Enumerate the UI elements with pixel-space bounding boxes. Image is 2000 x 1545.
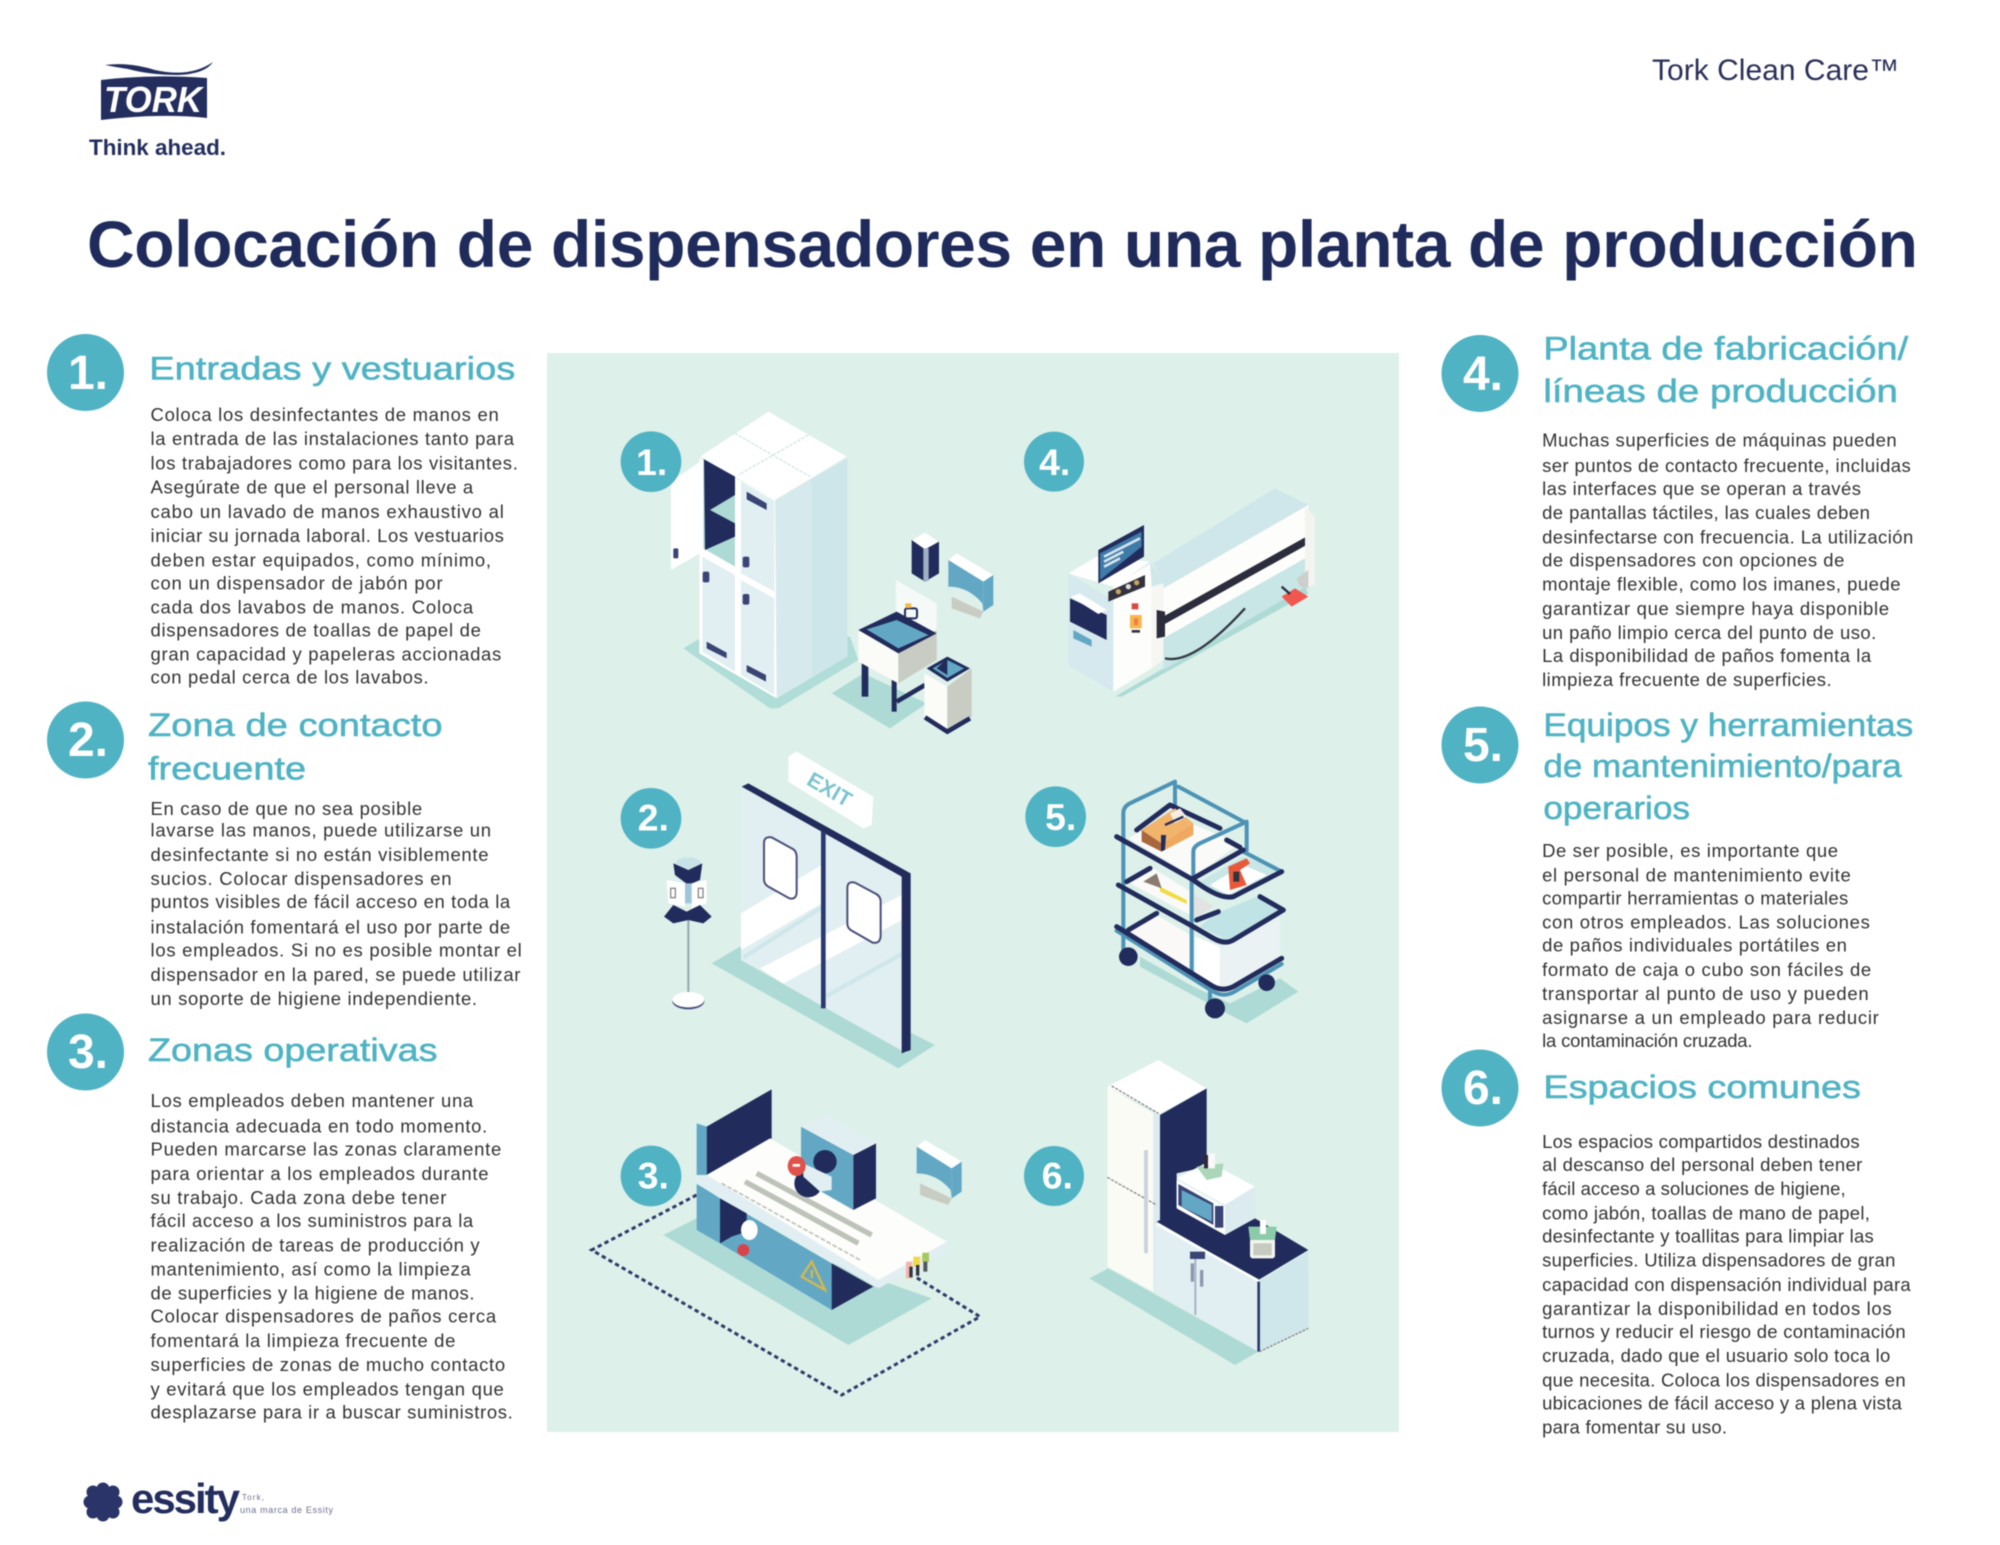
badge 3: 3. bbox=[68, 1026, 108, 1079]
heading 4: Planta de fabricación/ bbox=[1543, 331, 1909, 367]
body text 1: cabo un lavado de manos exhaustivo al bbox=[151, 501, 504, 522]
footer logo: Essity: Tork, bbox=[242, 1493, 264, 1502]
body text 6: al descanso del personal deben tener bbox=[1542, 1154, 1862, 1175]
body text 4: de dispensadores con opciones de bbox=[1542, 549, 1844, 570]
body text 3 bbox=[151, 1090, 513, 1422]
section 5: maintenance tools bbox=[1442, 706, 1913, 1051]
heading 2 bbox=[148, 707, 443, 786]
body text 4: ser puntos de contacto frecuente, incluidas bbox=[1542, 455, 1911, 476]
heading 5: operarios bbox=[1543, 790, 1690, 826]
heading 5: Equipos y herramientas bbox=[1543, 707, 1913, 743]
body text 3: Colocar dispensadores de paños cerca bbox=[151, 1306, 497, 1327]
body text 2: sucios. Colocar dispensadores en bbox=[151, 868, 452, 889]
badge 5 bbox=[1442, 706, 1518, 784]
body text 6: turnos y reducir el riesgo de contaminación bbox=[1542, 1321, 1906, 1342]
body text 4: desinfectarse con frecuencia. La utilización bbox=[1542, 526, 1913, 547]
footer logo: Essity bbox=[84, 1475, 334, 1522]
panel: illustrations background bbox=[547, 353, 1399, 1432]
body text 2: dispensador en la pared, se puede utilizar bbox=[151, 964, 520, 985]
body text 3: fácil acceso a los suministros para la bbox=[151, 1210, 474, 1231]
section 2: high-contact zone bbox=[47, 702, 522, 1009]
body text 4: Muchas superficies de máquinas pueden bbox=[1542, 429, 1897, 450]
logo: Tork: Think ahead. bbox=[89, 135, 226, 160]
body text 6: que necesita. Coloca los dispensadores en bbox=[1542, 1369, 1906, 1390]
body text 5: transportar al punto de uso y pueden bbox=[1542, 983, 1869, 1004]
logo: Tork: TORK bbox=[104, 79, 205, 120]
illustration 6: common area kitchen bbox=[1024, 1060, 1308, 1365]
body text 2 bbox=[151, 798, 522, 1009]
body text 6: para fomentar su uso. bbox=[1542, 1417, 1727, 1438]
illustration 6: common area kitchen: 6. bbox=[1042, 1154, 1073, 1196]
heading 2: frecuente bbox=[148, 750, 306, 786]
body text 1: con un dispensador de jabón por bbox=[151, 572, 443, 593]
body text 6: garantizar la disponibilidad en todos los bbox=[1542, 1298, 1892, 1319]
illustration 1: lockers and sink bbox=[621, 412, 993, 732]
body text 1: iniciar su jornada laboral. Los vestuarios bbox=[151, 525, 504, 546]
body text 4: de pantallas táctiles, las cuales deben bbox=[1542, 502, 1870, 523]
body text 1: la entrada de las instalaciones tanto para bbox=[151, 428, 515, 449]
badge 1: 1. bbox=[68, 347, 108, 400]
section 6: common areas bbox=[1442, 1050, 1911, 1438]
illustration 4: production line machine: 4. bbox=[1039, 441, 1070, 483]
illustration 5: tool trolley bbox=[1025, 782, 1298, 1023]
body text 1: Asegúrate de que el personal lleve a bbox=[151, 477, 474, 498]
section 4: manufacturing floor bbox=[1442, 331, 1913, 690]
body text 2: lavarse las manos, puede utilizarse un bbox=[151, 820, 491, 841]
body text 5: de paños individuales portátiles en bbox=[1542, 935, 1847, 956]
body text 6: Los espacios compartidos destinados bbox=[1542, 1131, 1860, 1152]
illustration 3: operating zone machine: 3. bbox=[638, 1154, 669, 1196]
body text 3: mantenimiento, así como la limpieza bbox=[151, 1259, 471, 1280]
body text 5: el personal de mantenimiento evite bbox=[1542, 864, 1851, 885]
heading 5: de mantenimiento/para bbox=[1543, 748, 1903, 784]
body text 4: montaje flexible, como los imanes, puede bbox=[1542, 574, 1900, 595]
body text 4: las interfaces que se operan a través bbox=[1542, 478, 1861, 499]
body text 2: desinfectante si no están visiblemente bbox=[151, 844, 489, 865]
illustration 2: exit doors and hygiene stand: EXIT bbox=[803, 767, 856, 812]
body text 5: asignarse a un empleado para reducir bbox=[1542, 1007, 1879, 1028]
footer logo: Essity: essity bbox=[131, 1475, 241, 1522]
heading 1: Entradas y vestuarios bbox=[149, 350, 515, 386]
badge 5: 5. bbox=[1463, 719, 1503, 772]
badge 1 bbox=[47, 334, 124, 411]
illustration 1: lockers and sink: 1. bbox=[636, 441, 667, 483]
heading 4: líneas de producción bbox=[1543, 373, 1898, 409]
illustration 3: operating zone machine bbox=[592, 1089, 980, 1395]
illustration 2: exit doors and hygiene stand: 2. bbox=[638, 797, 669, 839]
body text 3: superficies de zonas de mucho contacto bbox=[151, 1354, 505, 1375]
badge 2: 2. bbox=[68, 714, 108, 767]
body text 3: distancia adecuada en todo momento. bbox=[151, 1116, 487, 1137]
badge 2 bbox=[47, 702, 124, 778]
body text 4: garantizar que siempre haya disponible bbox=[1542, 598, 1889, 619]
body text 4 bbox=[1542, 429, 1913, 690]
body text 5: con otros empleados. Las soluciones bbox=[1542, 912, 1870, 933]
heading 6: Espacios comunes bbox=[1543, 1069, 1861, 1105]
body text 3: realización de tareas de producción y bbox=[151, 1234, 480, 1255]
section 1: entrances and changing rooms bbox=[47, 334, 518, 688]
body text 3: desplazarse para ir a buscar suministros. bbox=[151, 1401, 513, 1422]
body text 1: Coloca los desinfectantes de manos en bbox=[151, 404, 499, 425]
illustration 2: exit doors and hygiene stand bbox=[621, 752, 935, 1068]
badge 6: 6. bbox=[1463, 1062, 1503, 1115]
body text 5: De ser posible, es importante que bbox=[1542, 840, 1838, 861]
logo: Tork bbox=[89, 62, 226, 160]
heading 3: Zonas operativas bbox=[148, 1032, 437, 1068]
body text 6: fácil acceso a soluciones de higiene, bbox=[1542, 1178, 1846, 1199]
body text 6: superficies. Utiliza dispensadores de gran bbox=[1542, 1250, 1895, 1271]
body text 4: La disponibilidad de paños fomenta la bbox=[1542, 645, 1872, 666]
body text 6: capacidad con dispensación individual para bbox=[1542, 1274, 1911, 1295]
body text 1: deben estar equipados, como mínimo, bbox=[151, 549, 491, 570]
body text 1: con pedal cerca de los lavabos. bbox=[151, 667, 429, 688]
body text 6: cruzada, dado que el usuario solo toca lo bbox=[1542, 1345, 1890, 1366]
illustration 4: production line machine bbox=[1024, 432, 1315, 697]
body text 1: cada dos lavabos de manos. Coloca bbox=[151, 597, 474, 618]
body text 2: puntos visibles de fácil acceso en toda la bbox=[151, 891, 511, 912]
body text 3: y evitará que los empleados tengan que bbox=[151, 1378, 504, 1399]
title: Colocación de dispensadores en una planta de producción bbox=[87, 207, 1918, 281]
body text 1: dispensadores de toallas de papel de bbox=[151, 619, 481, 640]
body text 3: para orientar a los empleados durante bbox=[151, 1163, 489, 1184]
heading 5 bbox=[1543, 707, 1913, 826]
body text 6: desinfectante y toallitas para limpiar las bbox=[1542, 1225, 1874, 1246]
footer logo: Essity: una marca de Essity bbox=[240, 1505, 334, 1515]
body text 1: los trabajadores como para los visitantes. bbox=[151, 452, 518, 473]
badge 4 bbox=[1442, 335, 1518, 412]
body text 6: ubicaciones de fácil acceso y a plena vista bbox=[1542, 1392, 1902, 1413]
body text 5: compartir herramientas o materiales bbox=[1542, 887, 1848, 908]
body text 3: su trabajo. Cada zona debe tener bbox=[151, 1187, 446, 1208]
heading 2: Zona de contacto bbox=[148, 707, 443, 743]
body text 3: Los empleados deben mantener una bbox=[151, 1090, 474, 1111]
body text 2: un soporte de higiene independiente. bbox=[151, 988, 477, 1009]
body text 2: En caso de que no sea posible bbox=[151, 798, 422, 819]
body text 2: los empleados. Si no es posible montar el bbox=[151, 940, 522, 961]
heading 4 bbox=[1543, 331, 1909, 409]
body text 3: de superficies y la higiene de manos. bbox=[151, 1283, 474, 1304]
badge 6 bbox=[1442, 1050, 1518, 1126]
body text 4: limpieza frecuente de superficies. bbox=[1542, 669, 1832, 690]
illustration 5: tool trolley: 5. bbox=[1045, 796, 1076, 838]
body text 1: gran capacidad y papeleras accionadas bbox=[151, 644, 501, 665]
body text 3: fomentará la limpieza frecuente de bbox=[151, 1330, 455, 1351]
body text 6: como jabón, toallas de mano de papel, bbox=[1542, 1202, 1870, 1223]
section 3: operating zones bbox=[47, 1014, 513, 1422]
badge 4: 4. bbox=[1463, 348, 1503, 401]
badge 3 bbox=[47, 1014, 124, 1090]
body text 5 bbox=[1542, 840, 1879, 1051]
body text 4: un paño limpio cerca del punto de uso. bbox=[1542, 622, 1876, 643]
body text 6 bbox=[1542, 1131, 1911, 1438]
body text 5: la contaminación cruzada. bbox=[1542, 1030, 1753, 1051]
body text 3: Pueden marcarse las zonas claramente bbox=[151, 1139, 501, 1160]
body text 2: instalación fomentará el uso por parte de bbox=[151, 917, 510, 938]
body text 5: formato de caja o cubo son fáciles de bbox=[1542, 959, 1871, 980]
body text 1 bbox=[151, 404, 518, 688]
brand label: Tork Clean Care: Tork Clean Care™ bbox=[1652, 54, 1899, 87]
